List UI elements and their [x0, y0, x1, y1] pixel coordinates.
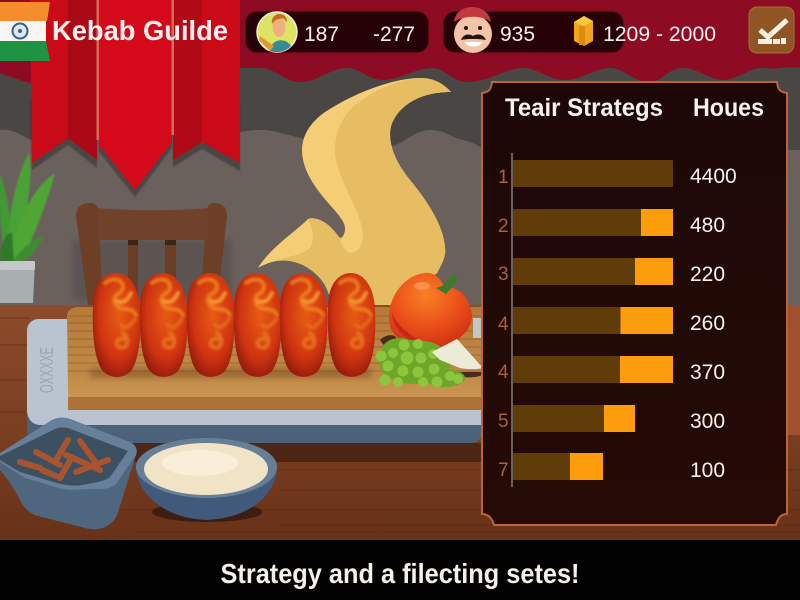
bottom caption bar: Strategy and a filecting setes! [220, 558, 580, 589]
red hanging banners [30, 0, 240, 197]
plant [0, 153, 55, 303]
yellow flame shape [258, 78, 451, 310]
value: 1209 - 2000: 1209 - 2000 [603, 23, 716, 46]
tray embossed mark: OXXXXE [37, 347, 57, 393]
bar row 4 [498, 307, 725, 335]
bar row 3: 3 [498, 264, 509, 285]
banner shadows [30, 100, 240, 197]
bar row 5: 370 [690, 361, 725, 384]
wall background [0, 0, 800, 310]
curtain valance [0, 0, 800, 83]
green peas [376, 338, 465, 388]
bar row 5: 4 [498, 362, 509, 383]
bar row 3: 220 [690, 263, 725, 286]
icon: chef face [454, 7, 492, 53]
wooden table [0, 305, 800, 540]
bar row 6: 5 [498, 411, 509, 432]
bar row 6: 300 [690, 410, 725, 433]
bar row 1: 4400 [690, 165, 737, 188]
bar row 2: 2 [498, 216, 509, 237]
bar row 1 [498, 160, 737, 188]
title: Kebab Guilde [52, 15, 228, 46]
value: -277: -277 [373, 23, 415, 46]
bar row 1: 1 [498, 167, 509, 188]
icon: player portrait [257, 12, 297, 52]
wooden chair [72, 203, 232, 306]
cutting board [67, 307, 483, 410]
onion wedge [432, 339, 483, 369]
tomato [389, 273, 472, 348]
bottom caption bar [0, 540, 800, 600]
stats pill: resources [443, 7, 716, 53]
heading: Teair Strategs: Teair Strategs [505, 94, 663, 122]
icon: gold bar [574, 16, 593, 46]
square bowl with cinnamon [0, 418, 137, 529]
bar row 7: 100 [690, 459, 725, 482]
bar row 5 [498, 356, 725, 384]
heading: Houes: Houes [693, 94, 764, 122]
bar row 7: 7 [498, 460, 509, 481]
garnish shadow [380, 335, 483, 377]
bar row 2: 480 [690, 214, 725, 237]
bar row 6 [498, 405, 725, 433]
serving tray [27, 319, 483, 462]
value: 187: 187 [304, 23, 339, 46]
kebab sausages [93, 273, 375, 377]
round bowl with rice [136, 438, 277, 522]
bar row 7 [498, 453, 725, 482]
bar row 3 [498, 258, 725, 286]
india flag [0, 2, 50, 61]
bar row 4: 260 [690, 312, 725, 335]
panel: tier strategy chart [482, 82, 787, 525]
chart axis [511, 153, 513, 487]
bar row 2 [498, 209, 725, 237]
settings button [749, 7, 794, 53]
stats pill: player [245, 11, 429, 53]
value: 935: 935 [500, 23, 535, 46]
bar row 4: 4 [498, 314, 509, 335]
